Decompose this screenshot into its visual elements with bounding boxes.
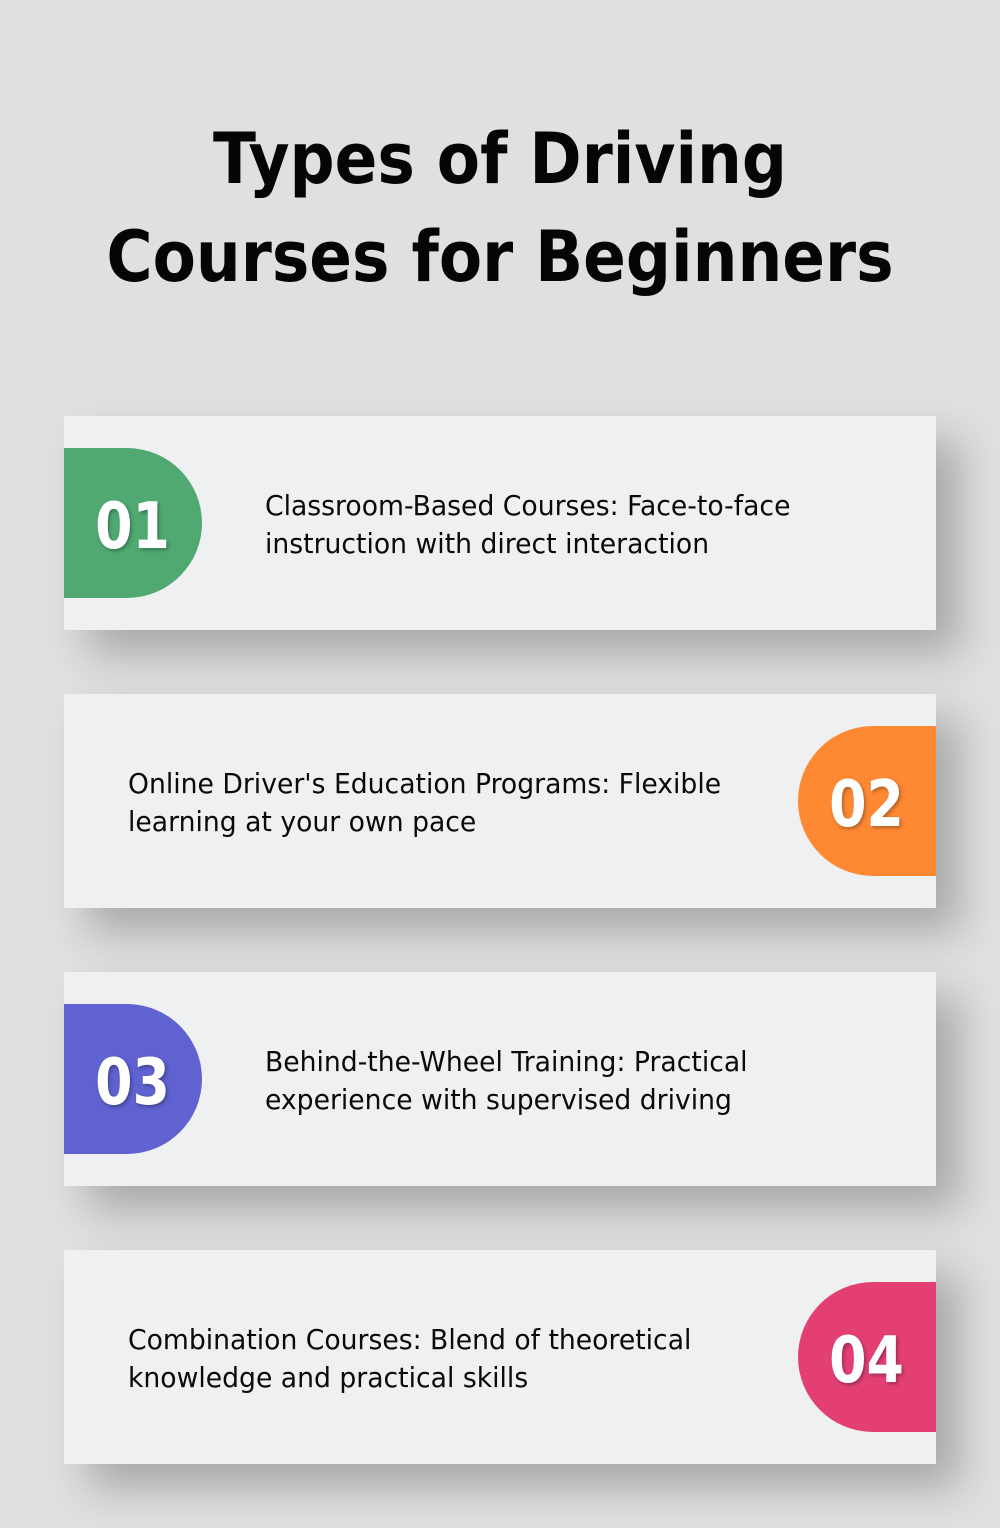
badge 01: 01	[96, 490, 170, 564]
badge 01	[64, 448, 202, 598]
text: combination courses	[128, 1323, 691, 1394]
title: Types of Driving	[213, 118, 787, 200]
text: classroom-based courses: instruction with direct interaction	[265, 527, 709, 560]
text: behind-the-wheel training	[265, 1045, 748, 1116]
text: classroom-based courses	[265, 489, 790, 560]
badge 02	[798, 726, 936, 876]
text: classroom-based courses: Classroom-Based Courses: Face-to-face	[265, 489, 790, 522]
text: online driver's education: learning at your own pace	[128, 805, 476, 838]
text: online driver's education	[128, 767, 721, 838]
badge 04	[798, 1282, 936, 1432]
panel: online driver's education	[64, 694, 936, 908]
panel: classroom-based courses	[64, 416, 936, 630]
text: behind-the-wheel training: Behind-the-Wheel Training: Practical	[265, 1045, 748, 1078]
panel: behind-the-wheel training	[64, 972, 936, 1186]
badge 02: 02	[830, 768, 904, 842]
badge 04: 04	[830, 1324, 904, 1398]
text: behind-the-wheel training: experience with supervised driving	[265, 1083, 732, 1116]
title: Courses for Beginners	[106, 216, 894, 298]
text: online driver's education: Online Driver's Education Programs: Flexible	[128, 767, 721, 800]
text: combination courses: Combination Courses: Blend of theoretical	[128, 1323, 691, 1356]
badge 03	[64, 1004, 202, 1154]
badge 03: 03	[96, 1046, 170, 1120]
text: combination courses: knowledge and practical skills	[128, 1361, 528, 1394]
title	[106, 118, 894, 298]
panel: combination courses	[64, 1250, 936, 1464]
